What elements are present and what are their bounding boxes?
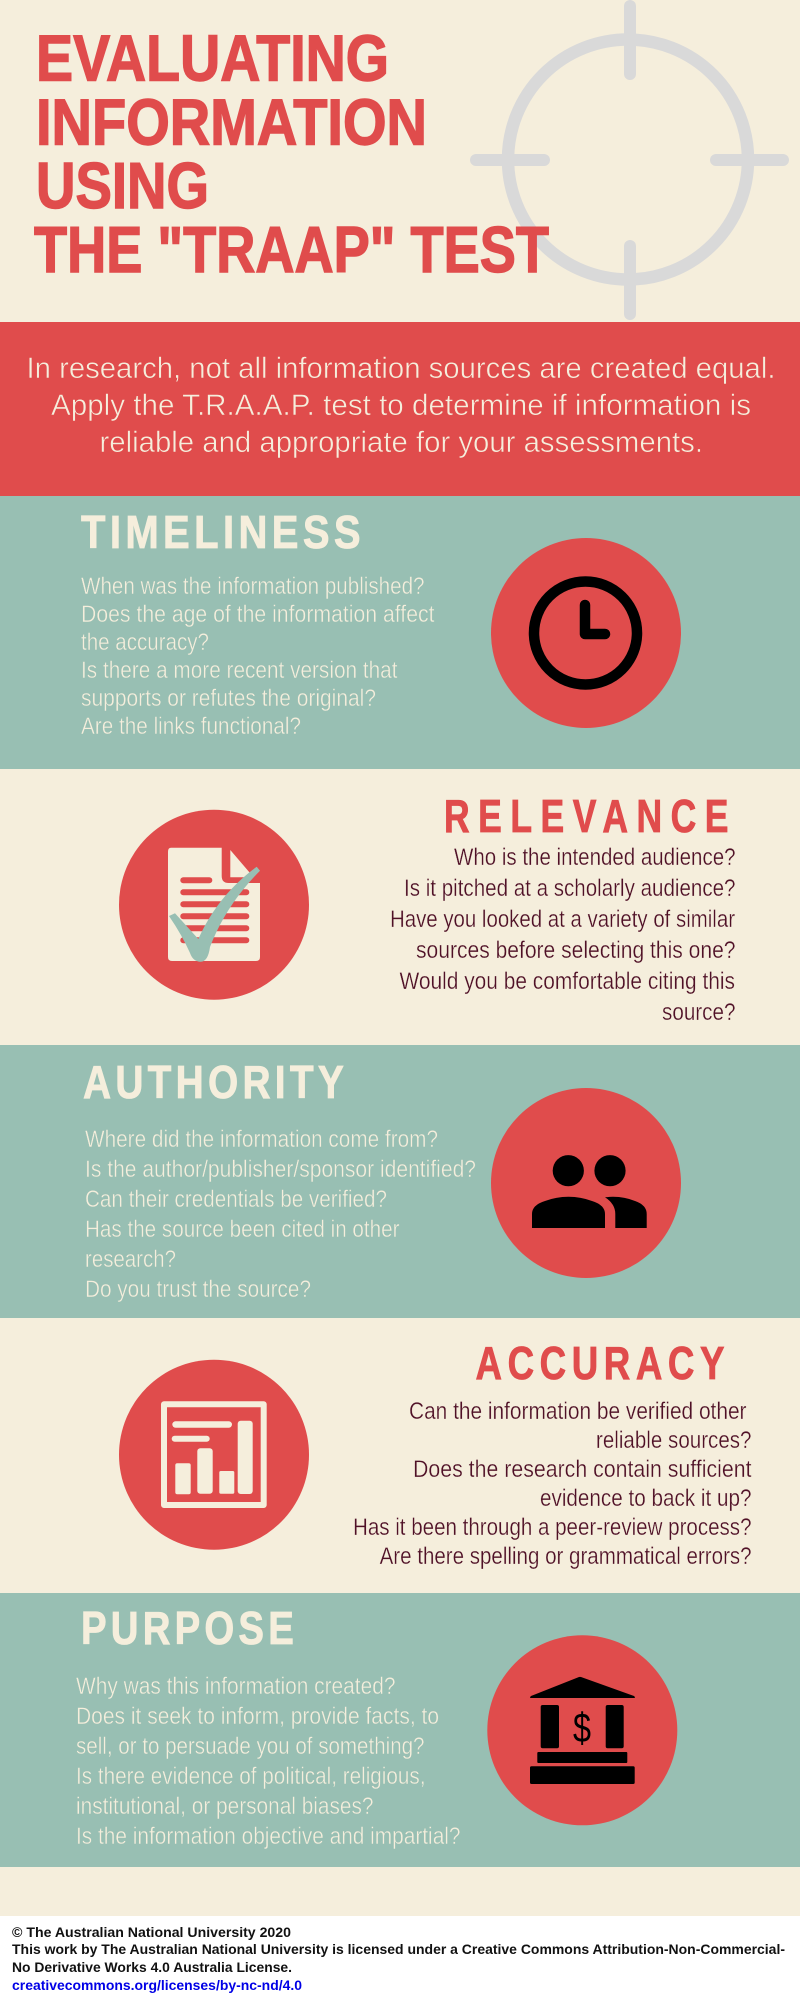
text: accuracy questions: reliable sources?: [596, 1427, 752, 1454]
panel: relevance: [0, 769, 800, 1045]
text: purpose questions: Is there evidence of political, religious,: [76, 1763, 426, 1790]
text: timeliness questions: the accuracy?: [81, 629, 209, 656]
text: authority questions: research?: [85, 1246, 176, 1273]
text: timeliness questions: supports or refutes the original?: [81, 685, 376, 712]
panel: footer licence: [0, 1916, 800, 2000]
text: authority questions: Is the author/publisher/sponsor identified?: [85, 1156, 476, 1183]
text: authority questions: Has the source been cited in other: [85, 1216, 400, 1243]
text: purpose questions: sell, or to persuade you of something?: [76, 1733, 424, 1760]
icon: bank with dollar sign: $: [573, 1704, 591, 1751]
text: relevance questions: Is it pitched at a scholarly audience?: [404, 875, 736, 902]
title: THE "TRAAP" TEST: [34, 213, 549, 286]
panel: timeliness: [0, 496, 800, 769]
text: authority questions: Can their credentials be verified?: [85, 1186, 387, 1213]
title: USING: [36, 149, 209, 222]
panel: footer licence: No Derivative Works 4.0 Australia License.: [12, 1959, 292, 1975]
heading: purpose: PURPOSE: [81, 1602, 298, 1654]
icon: target crosshair: [470, 0, 789, 320]
text: timeliness questions: Are the links functional?: [81, 713, 301, 740]
panel: accuracy: [0, 1318, 800, 1593]
panel: introduction: Apply the T.R.A.A.P. test to determine if information is: [51, 389, 751, 422]
panel: introduction: In research, not all information sources are created equal.: [26, 352, 776, 385]
text: timeliness questions: [81, 573, 435, 740]
icon: people: [491, 1088, 681, 1278]
heading: accuracy: ACCURACY: [476, 1337, 730, 1389]
panel: purpose: [0, 1593, 800, 1867]
text: relevance questions: sources before selecting this one?: [416, 937, 736, 964]
text: relevance questions: source?: [662, 999, 736, 1026]
icon: report with bar chart: [119, 1360, 309, 1550]
text: accuracy questions: evidence to back it up?: [540, 1485, 752, 1512]
text: relevance questions: Have you looked at a variety of similar: [390, 906, 735, 933]
title: [34, 22, 549, 286]
text: accuracy questions: Does the research contain sufficient: [413, 1456, 752, 1483]
panel: introduction: reliable and appropriate for your assessments.: [100, 426, 703, 459]
panel: footer licence: © The Australian National University 2020: [12, 1924, 291, 1940]
text: purpose questions: institutional, or personal biases?: [76, 1793, 374, 1820]
panel: authority: [0, 1045, 800, 1318]
panel: introduction: [0, 322, 800, 496]
text: authority questions: Where did the information come from?: [85, 1126, 438, 1153]
text: purpose questions: Does it seek to inform, provide facts, to: [76, 1703, 439, 1730]
text: timeliness questions: Does the age of the information affect: [81, 601, 435, 628]
text: purpose questions: Why was this information created?: [76, 1673, 396, 1700]
text: timeliness questions: When was the information published?: [81, 573, 424, 600]
text: authority questions: Do you trust the source?: [85, 1276, 311, 1303]
text: relevance questions: Would you be comfortable citing this: [400, 968, 735, 995]
icon: bank with dollar sign: [487, 1635, 677, 1825]
heading: timeliness: TIMELINESS: [81, 506, 365, 558]
text: relevance questions: [390, 844, 736, 1026]
text: accuracy questions: Can the information be verified other: [409, 1398, 747, 1425]
title: INFORMATION: [36, 86, 427, 158]
text: purpose questions: Is the information objective and impartial?: [76, 1823, 460, 1850]
title: EVALUATING: [36, 22, 389, 94]
panel: footer licence: This work by The Australian National University is licensed under a Creative Commons Attribution-Non-Commercial-: [12, 1941, 785, 1957]
heading: authority: AUTHORITY: [83, 1056, 348, 1108]
icon: clock: [491, 538, 681, 728]
panel: footer licence: creativecommons.org/licenses/by-nc-nd/4.0: [12, 1977, 302, 1993]
text: purpose questions: [76, 1673, 460, 1850]
text: authority questions: [85, 1126, 476, 1303]
text: timeliness questions: Is there a more recent version that: [81, 657, 398, 684]
icon: document with check mark: [119, 810, 309, 1000]
text: accuracy questions: [353, 1398, 752, 1570]
text: relevance questions: Who is the intended audience?: [454, 844, 736, 871]
